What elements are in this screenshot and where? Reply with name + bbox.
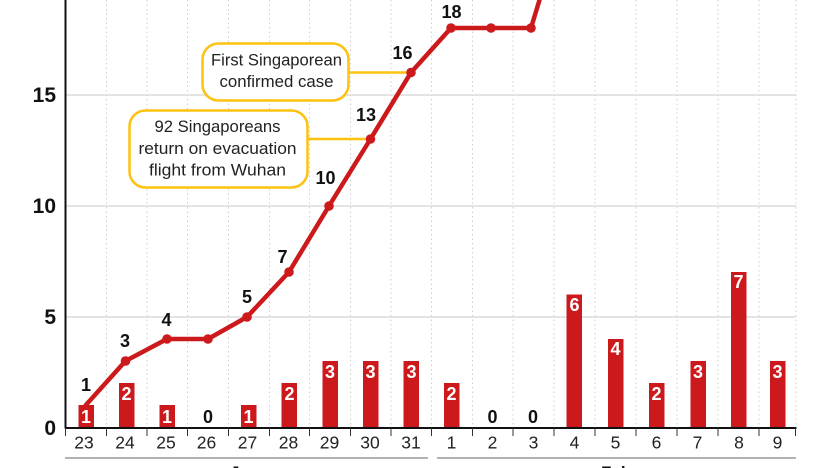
bar value labels: 1	[243, 407, 254, 427]
callout: first Singaporean confirmed case: confirmed case	[220, 73, 334, 91]
cumulative value labels: 13	[356, 105, 376, 125]
cumulative value labels: 3	[120, 331, 130, 351]
bar value labels: 0	[528, 407, 538, 427]
callout: evacuation flight: flight from Wuhan	[149, 162, 286, 180]
bar value labels: 3	[365, 362, 376, 382]
x axis: 26	[197, 432, 216, 452]
x axis: 30	[360, 432, 380, 452]
x axis: 6	[652, 432, 661, 452]
cumulative value labels: 10	[315, 168, 336, 188]
bar value labels: 2	[284, 384, 295, 404]
x axis: 7	[693, 432, 702, 452]
x axis: 2	[488, 432, 497, 452]
bar value labels: 3	[406, 362, 417, 382]
y axis: 0	[44, 417, 56, 440]
y axis	[33, 0, 66, 440]
cumulative value labels: 7	[277, 247, 288, 267]
callout: evacuation flight: 92 Singaporeans	[154, 118, 280, 136]
cumulative cases line	[85, 0, 541, 406]
x axis: 24	[115, 432, 135, 452]
month brackets and labels	[65, 458, 796, 468]
callout connectors	[308, 72, 411, 139]
cumulative value labels: 4	[161, 310, 172, 330]
x axis: 23	[74, 432, 94, 452]
x axis: 29	[320, 432, 339, 452]
cumulative value labels: 16	[392, 43, 413, 63]
callout: evacuation flight: return on evacuation	[138, 140, 296, 158]
cumulative value labels: 5	[242, 287, 252, 307]
x axis: 4	[570, 432, 580, 452]
cumulative value labels: 1	[81, 375, 91, 395]
bar value labels: 3	[325, 362, 335, 382]
bar value labels: 1	[81, 407, 91, 427]
bar value labels	[81, 272, 783, 427]
bar value labels: 2	[121, 384, 132, 404]
bar value labels: 1	[162, 407, 172, 427]
bar value labels: 3	[693, 362, 703, 382]
bar value labels: 7	[733, 272, 744, 292]
bar value labels: 2	[651, 384, 662, 404]
cumulative value labels	[81, 2, 462, 395]
bar value labels: 3	[772, 362, 783, 382]
y axis: 5	[44, 306, 56, 329]
x axis: 27	[238, 432, 257, 452]
daily new cases bars	[78, 272, 786, 428]
bar value labels: 0	[203, 407, 213, 427]
y axis: 10	[33, 195, 56, 218]
bar value labels: 0	[487, 407, 498, 427]
bar value labels: 6	[569, 295, 580, 315]
x axis	[65, 428, 796, 452]
cumulative value labels: 18	[441, 2, 462, 22]
x axis: 31	[401, 432, 421, 452]
callout: first Singaporean confirmed case: First Singaporean	[211, 52, 342, 70]
bar value labels: 4	[610, 339, 621, 359]
bar value labels: 2	[446, 384, 457, 404]
x axis: 3	[529, 432, 538, 452]
x axis: 9	[773, 432, 782, 452]
x axis: 25	[156, 432, 176, 452]
callout: first Singaporean confirmed case	[202, 44, 348, 100]
x axis: 8	[734, 432, 744, 452]
y axis: 15	[33, 84, 56, 107]
callout: evacuation flight	[130, 110, 308, 188]
x axis: 5	[611, 432, 620, 452]
x axis: 1	[447, 432, 456, 452]
x axis: 28	[279, 432, 298, 452]
